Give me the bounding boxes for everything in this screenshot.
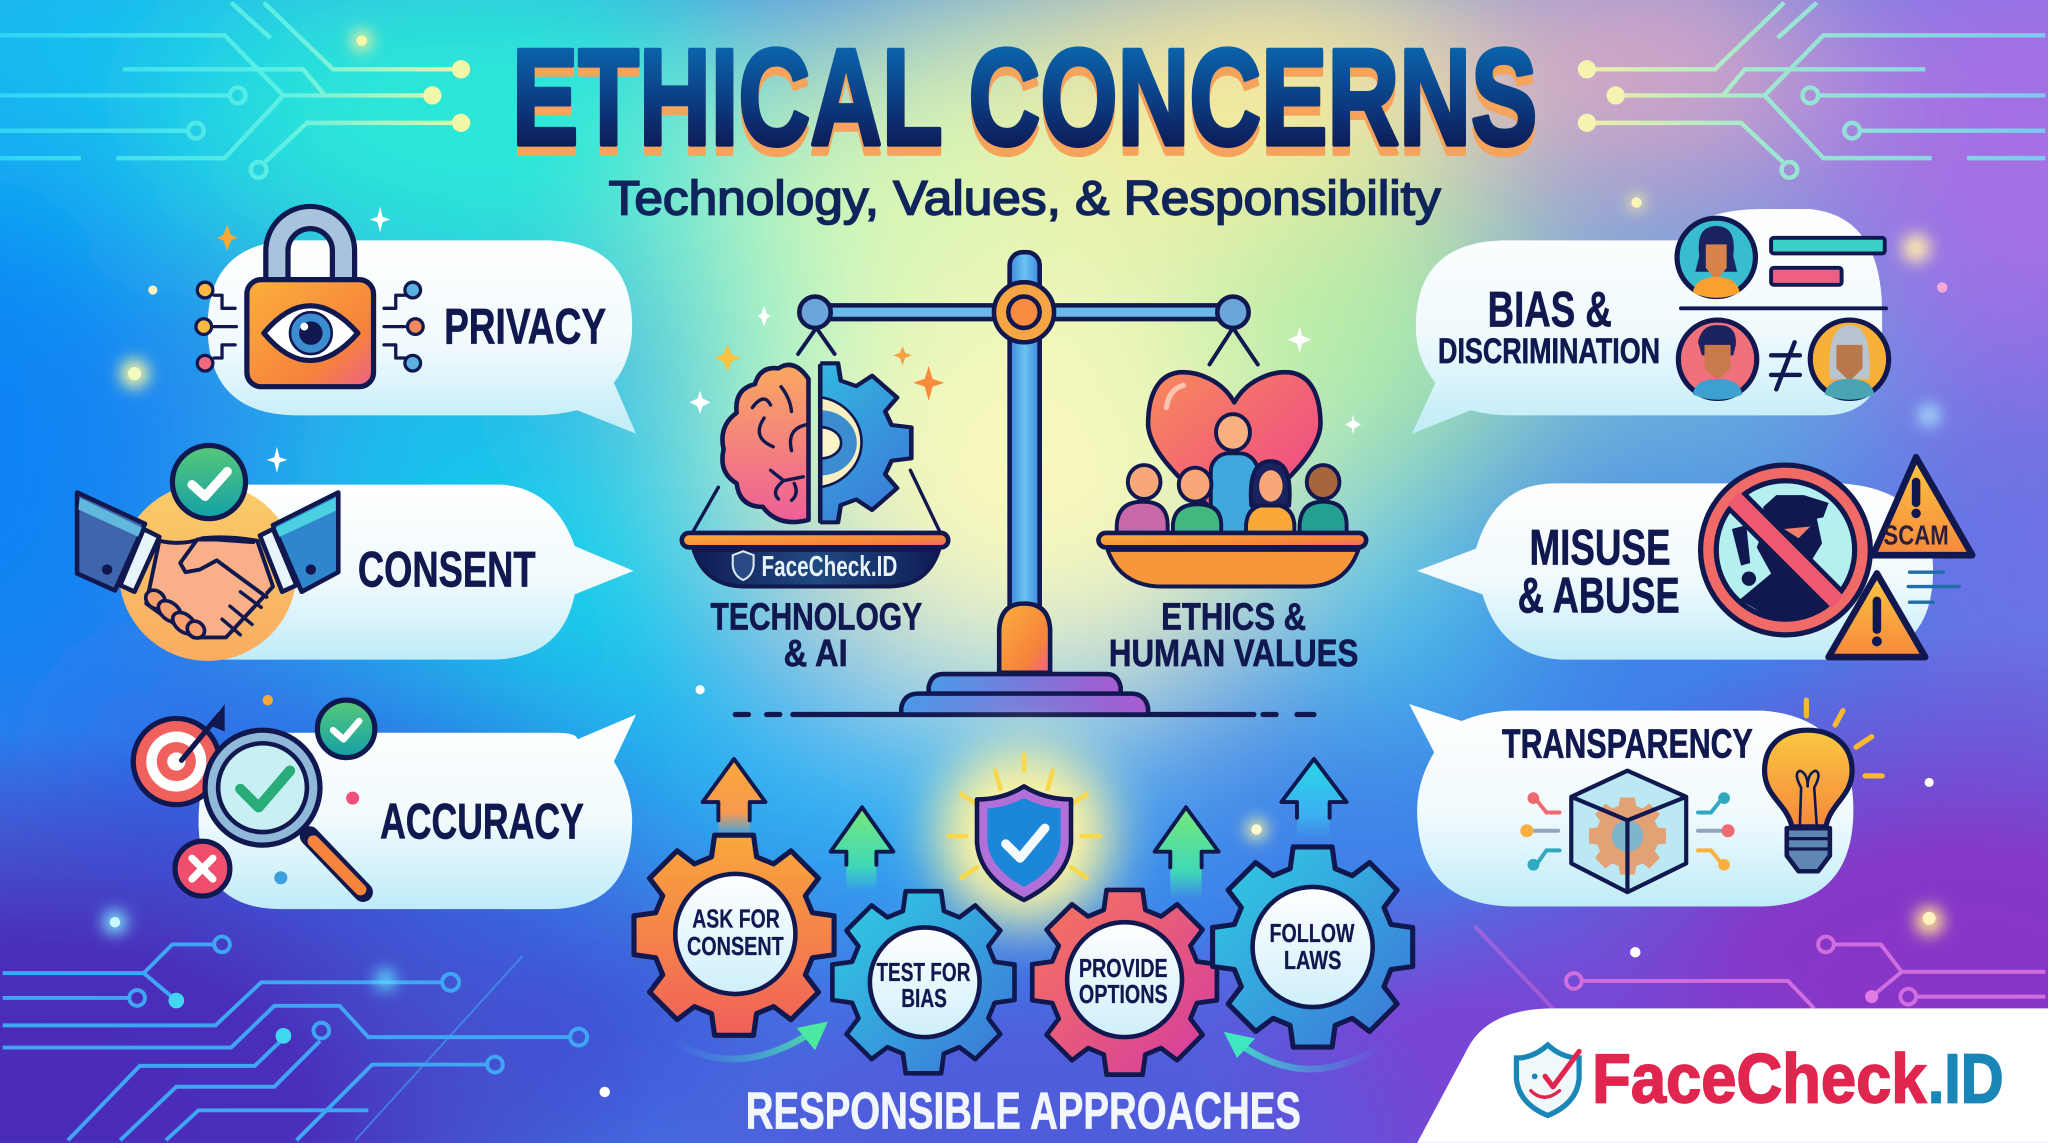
balance scale	[682, 252, 1366, 715]
subtitle: Technology, Values, & Responsibility	[609, 171, 1442, 225]
label: ethics and human values: HUMAN VALUES	[1109, 633, 1358, 675]
icon: brain	[722, 365, 808, 522]
gear: test for bias	[832, 891, 1014, 1073]
icon: prohibited hacker with warnings	[1701, 457, 1972, 657]
left pan: technology and AI	[682, 363, 948, 587]
circuit: bottom right	[1475, 926, 2045, 1008]
ground line	[735, 713, 1314, 717]
gear: provide options: PROVIDE	[1079, 953, 1168, 983]
panel: privacy	[196, 206, 636, 434]
label: transparency: TRANSPARENCY	[1502, 721, 1753, 767]
arrow: blue	[1281, 759, 1347, 839]
icon: prohibited hacker with warnings: SCAM	[1883, 520, 1949, 551]
arrow outlines	[703, 759, 1347, 867]
icon: heart	[1148, 372, 1320, 533]
right pan: ethics and human values	[1098, 372, 1366, 587]
logo panel	[1417, 1008, 2048, 1143]
scale pivot	[994, 282, 1054, 342]
logo wordmark: FaceCheck	[1592, 1039, 1927, 1117]
panel: bias and discrimination	[1412, 209, 1889, 434]
label: bias: BIAS &	[1488, 282, 1612, 338]
label: misuse: MISUSE	[1529, 519, 1671, 575]
icon: faces with bars and not equal	[1677, 218, 1889, 400]
bubble: consent	[222, 485, 633, 660]
icon: people group	[1117, 414, 1347, 534]
shield glow	[935, 747, 1113, 925]
gear: follow laws: FOLLOW	[1270, 918, 1355, 948]
gear: provide options: OPTIONS	[1079, 979, 1168, 1009]
icon: shield with check	[948, 755, 1100, 900]
scale base	[929, 674, 1121, 694]
icon: padlock with eye	[196, 206, 423, 387]
bubble: accuracy	[199, 715, 636, 909]
label: technology and AI: TECHNOLOGY	[711, 597, 922, 639]
title	[512, 21, 1537, 184]
pan bowl	[1108, 550, 1358, 587]
left pan: technology and AI: FaceCheck.ID	[761, 551, 897, 583]
label: technology and AI: & AI	[784, 633, 848, 675]
gear: test for bias: BIAS	[901, 983, 947, 1013]
circuit: top left	[0, 3, 470, 178]
panel: transparency	[1409, 700, 1882, 907]
section: responsible approaches	[634, 747, 1413, 1141]
label: abuse: & ABUSE	[1518, 568, 1680, 624]
gear: ask for consent: CONSENT	[687, 931, 784, 961]
panel: misuse and abuse	[1417, 457, 1972, 660]
bubble: bias	[1412, 209, 1882, 434]
label: accuracy: ACCURACY	[380, 794, 584, 850]
circuit: top right	[1578, 3, 2045, 178]
title: ETHICAL CONCERNS	[512, 31, 1537, 184]
heading: responsible approaches: RESPONSIBLE APPROACHES	[746, 1083, 1301, 1141]
gear: provide options	[1032, 890, 1217, 1075]
title: ETHICAL CONCERNS	[512, 21, 1537, 174]
label: consent: CONSENT	[358, 542, 536, 598]
icon: handshake	[77, 445, 338, 661]
label: technology and AI	[711, 597, 922, 675]
gear: ask for consent	[634, 835, 834, 1035]
gear: test for bias: TEST FOR	[876, 957, 971, 987]
logo wordmark: .ID	[1928, 1039, 2004, 1117]
circuit: bottom left	[3, 937, 587, 1140]
icon: half gear	[818, 361, 914, 524]
arrow: curved left	[666, 1021, 828, 1059]
logo shield	[1516, 1045, 1579, 1116]
icon: cube with gear	[1520, 771, 1735, 892]
panel: accuracy	[133, 695, 636, 909]
bubble: privacy	[208, 240, 636, 434]
arrow: green right	[1155, 807, 1219, 899]
gear: follow laws: LAWS	[1284, 945, 1341, 975]
sparkles around scale	[690, 306, 1361, 435]
icon: light bulb	[1765, 700, 1882, 871]
scale pillar	[1010, 252, 1040, 618]
label: ethics and human values	[1109, 597, 1358, 675]
bubble: transparency	[1409, 704, 1853, 907]
label: discrimination: DISCRIMINATION	[1438, 332, 1660, 371]
arrow: orange	[703, 759, 765, 836]
arrow: green left	[831, 807, 893, 891]
panel: consent	[77, 445, 633, 661]
bubble: misuse	[1417, 483, 1933, 660]
icon: magnifier, target and checks	[133, 695, 375, 896]
pan bowl with logo	[694, 550, 939, 587]
arrow: curved right	[1224, 1032, 1386, 1069]
label: ethics and human values: ETHICS &	[1161, 597, 1306, 639]
label: privacy: PRIVACY	[444, 299, 606, 355]
scale beam	[815, 305, 1233, 319]
gear: follow laws	[1213, 847, 1413, 1047]
gear: ask for consent: ASK FOR	[692, 903, 780, 933]
